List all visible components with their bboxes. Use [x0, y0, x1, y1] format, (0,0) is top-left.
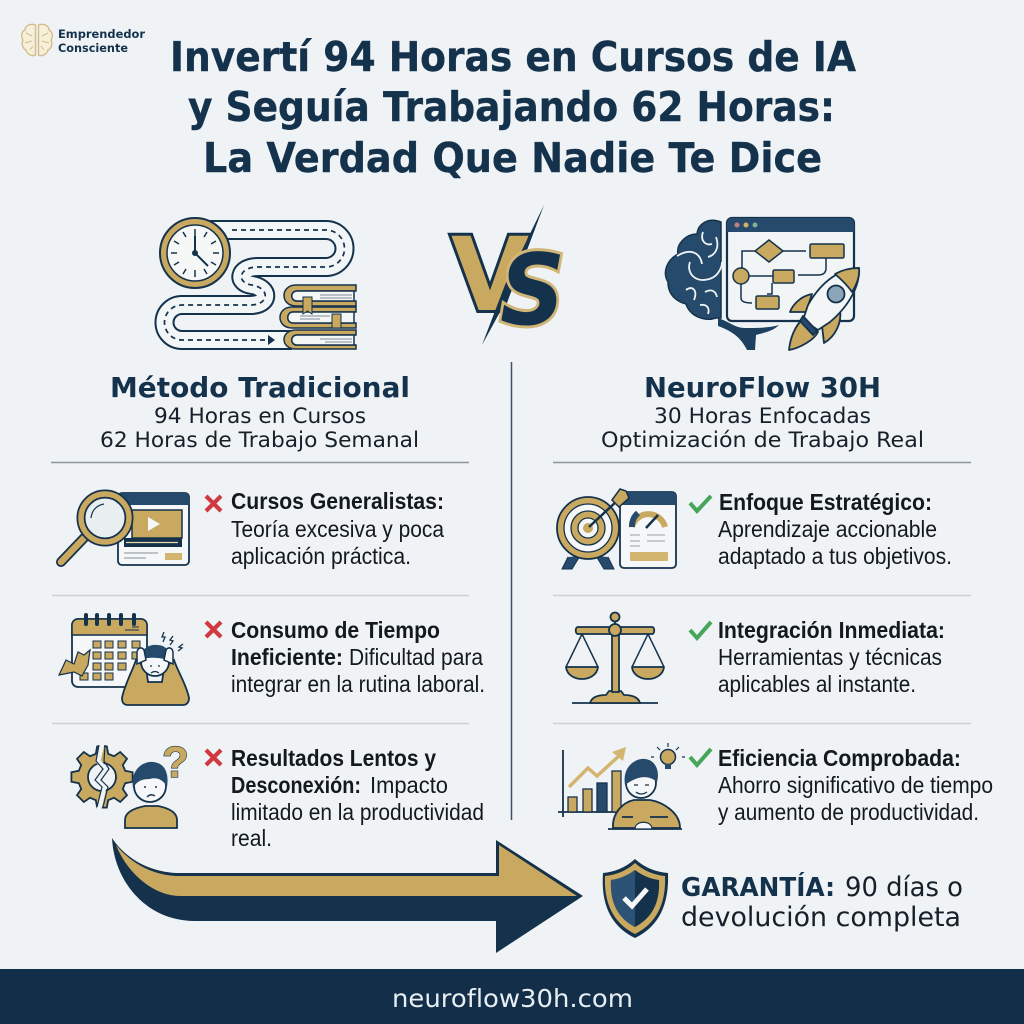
subheading: traditional hours: 62 Horas de Trabajo Semanal: [100, 428, 419, 452]
subheading: traditional hours: 94 Horas en Cursos: [154, 404, 366, 428]
text: Ineficiente:: [231, 644, 343, 670]
footer bar: [0, 969, 1024, 1024]
clock: [160, 218, 230, 288]
icon: green check: [690, 496, 711, 511]
title: La Verdad Que Nadie Te Dice: [203, 134, 822, 182]
guarantee text: GARANTÍA:: [681, 871, 835, 903]
text: [231, 617, 485, 697]
icon: red cross: [206, 750, 221, 765]
text: Eficiencia Comprobada:: [718, 745, 961, 771]
icon: winding road with clock and books: [160, 218, 356, 349]
text: Enfoque Estratégico:: [719, 489, 932, 515]
right row 1: Enfoque Estratégico: [557, 489, 952, 569]
text: Herramientas y técnicas: [718, 644, 942, 670]
title: Invertí 94 Horas en Cursos de IA: [170, 33, 856, 81]
icon: brain with workflow window and rocket: [665, 218, 859, 350]
text: adaptado a tus objetivos.: [718, 543, 952, 569]
letter V: V: [451, 216, 529, 335]
subheading: NeuroFlow hours: [601, 404, 924, 452]
text: [718, 617, 945, 697]
text: Desconexión:: [231, 772, 361, 798]
icon: guarantee shield: [603, 859, 668, 938]
letter S: S: [500, 234, 565, 348]
question mark: ?: [162, 738, 189, 787]
workflow window: [727, 218, 854, 321]
text: Teoría excesiva y poca: [231, 516, 444, 542]
icon: magnifier and video window: [61, 493, 189, 565]
text: Cursos Generalistas:: [231, 488, 444, 514]
guarantee text: devolución completa: [681, 902, 961, 933]
icon: green check: [690, 622, 711, 638]
right row 2: Integración Inmediata: [566, 612, 945, 703]
logo text: [58, 27, 145, 55]
text: Aprendizaje accionable: [718, 516, 937, 542]
text: aplicables al instante.: [718, 671, 916, 697]
subheading: traditional hours: [100, 404, 419, 452]
brain: [665, 220, 779, 350]
icon: calendar with stressed person: [59, 615, 189, 705]
footer url: neuroflow30h.com: [392, 984, 633, 1013]
text: Resultados Lentos y: [231, 745, 436, 771]
VS badge: [451, 205, 565, 348]
icon: pale brain: [22, 24, 52, 56]
icon: red cross: [206, 496, 221, 511]
text: Ahorro significativo de tiempo: [718, 772, 993, 798]
books: [280, 285, 356, 349]
text: y aumento de productividad.: [718, 799, 979, 825]
rocket: [789, 268, 859, 350]
right row 3: Eficiencia Comprobada: [558, 743, 993, 829]
icon: target with dashboard: [557, 489, 676, 569]
text: limitado en la productividad: [231, 799, 484, 825]
text: Consumo de Tiempo: [231, 617, 440, 643]
left row 2: Consumo de Tiempo Ineficiente: [59, 615, 485, 705]
title: y Seguía Trabajando 62 Horas:: [188, 83, 835, 131]
text: [231, 745, 484, 851]
left row 1: Cursos Generalistas: [61, 488, 444, 569]
icon: broken gear with confused person: [71, 738, 189, 828]
text: integrar en la rutina laboral.: [231, 671, 485, 697]
road: [164, 230, 344, 345]
icon: red cross: [206, 622, 221, 637]
slash: [482, 205, 544, 345]
icon: green check: [690, 749, 711, 765]
icon: balance scale: [566, 612, 664, 703]
heading: NeuroFlow 30H: NeuroFlow 30H: [644, 371, 881, 404]
text: Integración Inmediata:: [718, 617, 945, 643]
icon: rising chart with calm person: [558, 743, 685, 829]
subheading: NeuroFlow hours: Optimización de Trabajo Real: [601, 428, 924, 452]
guarantee text: 90 días o: [845, 872, 963, 903]
logo: Emprendedor Consciente: [22, 24, 145, 56]
guarantee text: [681, 871, 963, 933]
text: Dificultad para: [349, 644, 483, 670]
text: [718, 745, 993, 825]
heading: Método Tradicional: Método Tradicional: [110, 371, 410, 404]
text: [718, 489, 952, 569]
text: Impacto: [370, 772, 448, 798]
subheading: NeuroFlow hours: 30 Horas Enfocadas: [654, 404, 871, 428]
arrow to guarantee: [112, 838, 583, 953]
logo text: Consciente: [58, 41, 128, 55]
text: aplicación práctica.: [231, 543, 411, 569]
title: [170, 33, 856, 182]
logo text: Emprendedor: [58, 27, 145, 41]
text: [231, 488, 444, 569]
text: real.: [231, 825, 272, 851]
left row 3: Resultados Lentos y Desconexión: [71, 738, 484, 851]
